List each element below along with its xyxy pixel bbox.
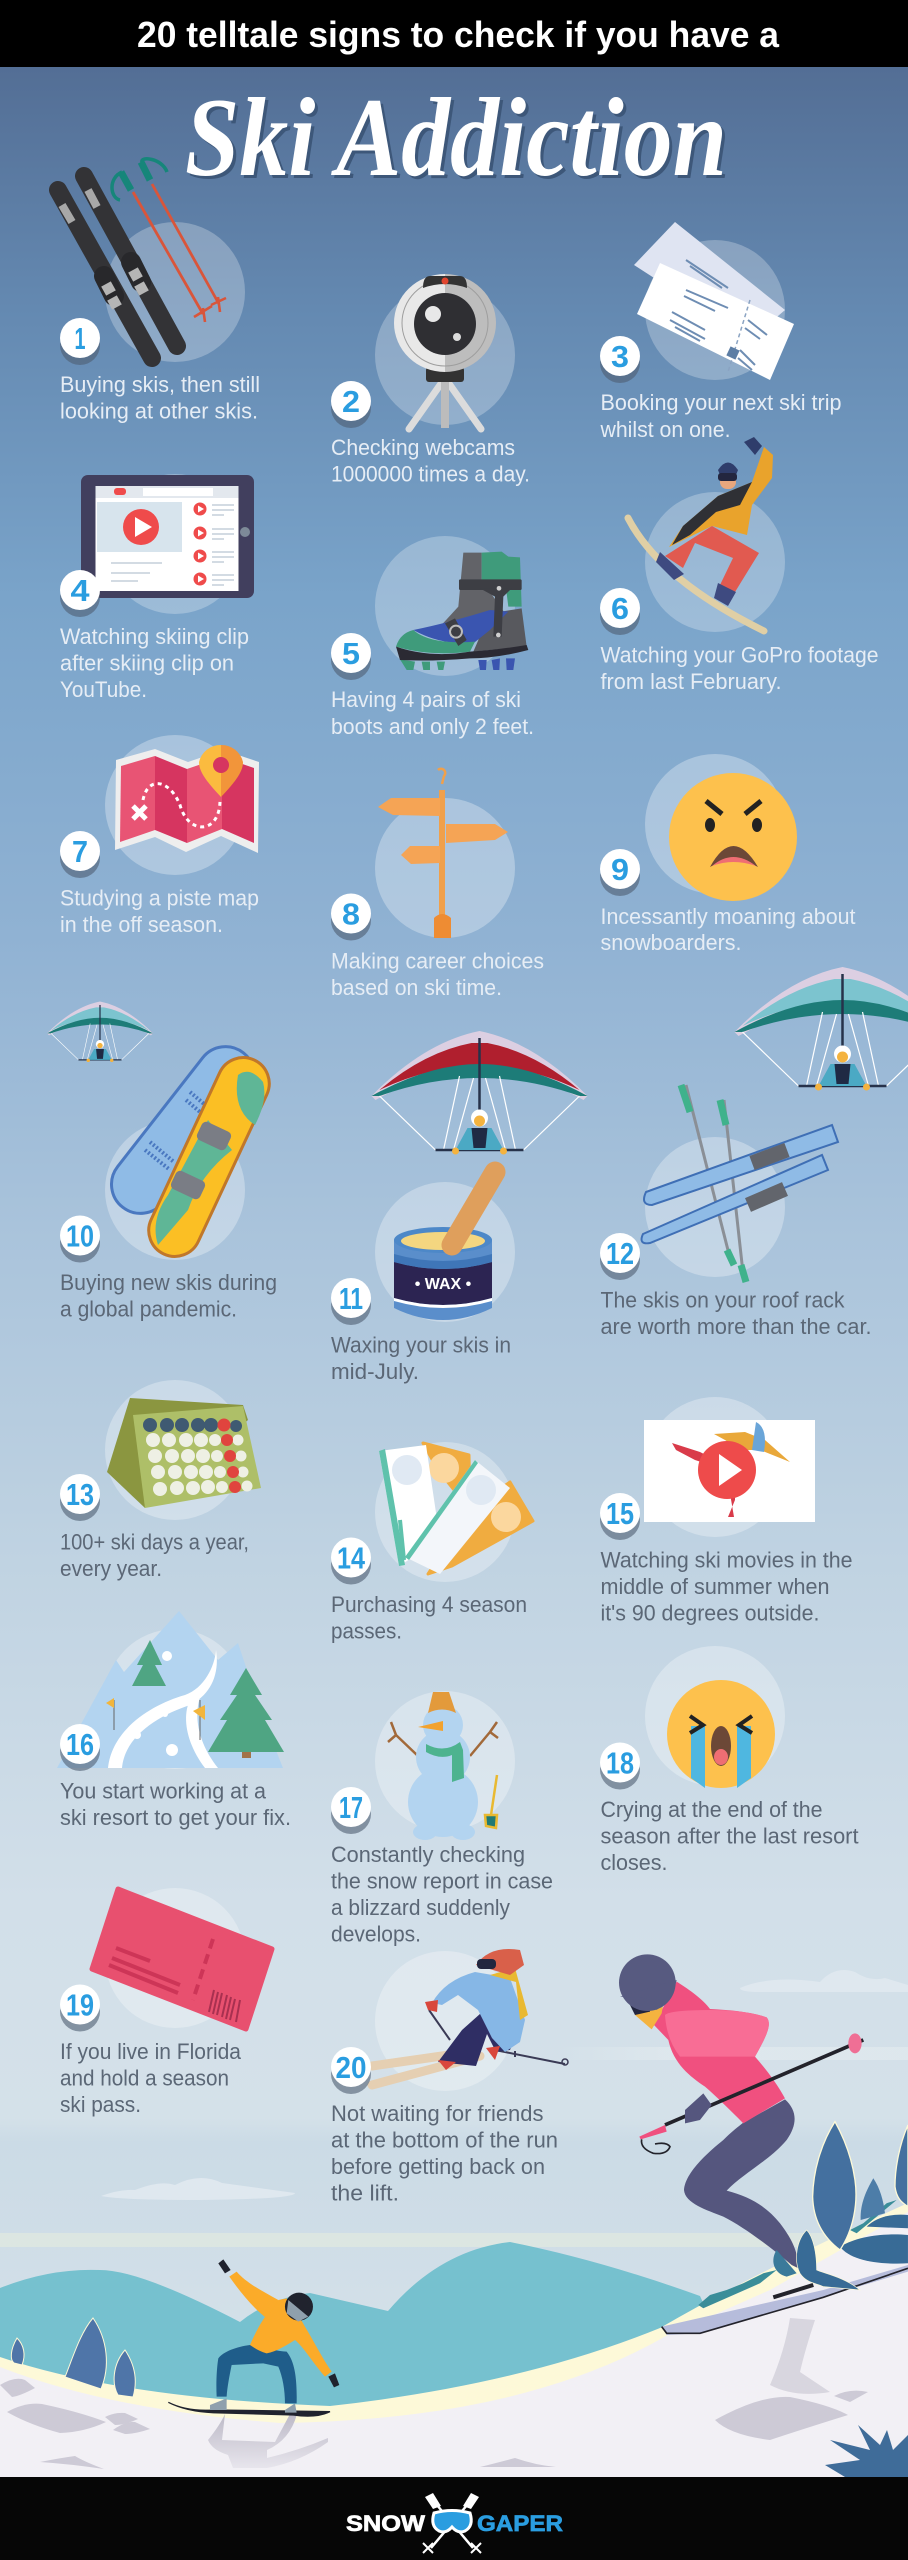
text 20: at the bottom of the run [331,2128,558,2152]
text 3: whilst on one. [600,417,730,442]
text 18 [600,1797,859,1875]
text 12: The skis on your roof rack [600,1288,845,1312]
snow slope [0,2203,908,2480]
badge 5 [331,633,371,680]
icon: skier [372,1949,568,2085]
badge 15 [600,1493,640,1540]
text 16: You start working at a [60,1778,266,1804]
icon: blue skis and poles [642,1085,838,1282]
badge 9 [600,849,640,896]
hills [0,2242,720,2420]
text 19 [60,2039,241,2117]
text 6 [600,642,878,694]
badge 16 [60,1724,100,1771]
header bar: 20 telltale signs to check if you have a [137,14,780,55]
badge 19: 19 [66,1988,94,2022]
text 20: before getting back on [331,2154,545,2179]
icon: video with skater [644,1420,815,1522]
sign 7: map [60,735,259,937]
badge 19 [60,1984,100,2032]
text 4: after skiing clip on [60,650,234,676]
badge 4: 4 [70,573,90,608]
footer bar [0,2477,908,2560]
icon: crying emoji [667,1680,775,1788]
text 10: Buying new skis during [60,1270,277,1295]
badge 8 [331,894,371,940]
text 9: Incessantly moaning about [600,904,856,929]
badge 17: 17 [339,1790,363,1825]
icon: snowboarder jump [628,437,773,631]
icon: ski boot [396,552,528,670]
badge 8: 8 [342,896,360,932]
left plants [11,2318,135,2397]
badge 6: 6 [611,591,629,626]
text 16 [60,1778,291,1830]
sign 16: ski resort [57,1611,291,1830]
text 18: season after the last resort [600,1824,859,1848]
text 12: are worth more than the car. [600,1314,872,1339]
icon: angry emoji [669,773,797,901]
icon: piste map [115,745,259,853]
badge 2 [331,381,371,428]
icon: mountain slope and trees [57,1611,284,1768]
snow shadows [0,2318,868,2469]
badge 13: 13 [66,1477,94,1512]
text 11 [331,1332,511,1384]
text 1: Buying skis, then still [60,372,260,397]
text 19: and hold a season [60,2066,229,2090]
badge 4 [60,570,100,617]
badge 7 [60,831,100,878]
badge 18 [600,1742,640,1790]
text 17: the snow report in case [331,1868,553,1894]
badge 10: 10 [66,1218,94,1254]
text 4: YouTube. [60,677,147,702]
gliders [47,967,908,1154]
text 19: If you live in Florida [60,2039,241,2064]
badge 10 [60,1216,100,1262]
text 9 [600,904,856,955]
icon: calendar [107,1398,261,1508]
sign 18: crying face [600,1646,859,1875]
badge 6 [600,588,640,635]
badge 17 [331,1787,371,1834]
text 3: Booking your next ski trip [600,390,842,415]
sign 1: skis [58,159,260,424]
text 8 [331,948,544,1000]
text 19: ski pass. [60,2092,141,2117]
text 6: Watching your GoPro footage [600,642,878,668]
sign 15: ski movies [600,1397,852,1626]
text 9: snowboarders. [600,930,742,955]
icon: wax can [394,1172,495,1320]
badge 2: 2 [342,384,360,419]
badge 11 [331,1278,371,1325]
sign 9: angry face [600,754,856,955]
middle glider [372,1031,588,1154]
text 6: from last February. [600,669,782,694]
badge 9: 9 [611,852,629,887]
sign 20: skier [331,1949,568,2206]
sign 10: snowboards [60,1035,278,1322]
badge 12: 12 [606,1236,634,1271]
text 4: Watching skiing clip [60,624,249,649]
text 20: Not waiting for friends [331,2101,544,2126]
text 4 [60,624,249,702]
sign 14: passes [331,1442,533,1644]
title: Ski Addiction [188,79,730,203]
badge 7: 7 [72,834,88,869]
text 11: mid-July. [331,1359,419,1384]
text 18: Crying at the end of the [600,1797,822,1822]
text 5 [331,687,534,739]
icon: season passes [379,1443,533,1574]
text 7: in the off season. [60,912,223,937]
text 18: closes. [600,1850,668,1875]
badge 3 [600,336,640,383]
text 13 [60,1530,249,1581]
text 2 [331,435,530,486]
text 17: Constantly checking [331,1842,525,1867]
badge 11: 11 [339,1281,363,1316]
icon: snowman [388,1692,498,1840]
text 8: based on ski time. [331,975,502,1000]
text 2: 1000000 times a day. [331,462,530,486]
text 15: middle of summer when [600,1574,830,1599]
clouds [101,1970,908,2200]
badge 18: 18 [606,1746,634,1780]
text 1: looking at other skis. [60,398,258,424]
badge 1: 1 [74,321,86,356]
text 10: a global pandemic. [60,1296,237,1322]
text 13: every year. [60,1556,162,1581]
sign 8: signpost [331,769,544,1000]
text 15: Watching ski movies in the [600,1548,852,1572]
text 5: boots and only 2 feet. [331,714,534,739]
text 20 [331,2101,558,2206]
icon: tablet with video [81,475,254,598]
icon: webcam [394,274,496,429]
text 5: Having 4 pairs of ski [331,687,521,712]
text 20: the lift. [331,2180,399,2206]
badge 3: 3 [611,339,629,374]
text 11: Waxing your skis in [331,1332,511,1358]
text 13: 100+ ski days a year, [60,1530,249,1554]
text 17: develops. [331,1922,421,1946]
icon: snowboards [100,1035,278,1265]
header bar [0,0,908,67]
badge 16: 16 [66,1727,94,1762]
badge 15: 15 [606,1496,634,1531]
text 3 [600,390,842,442]
title: Ski Addiction [185,76,727,200]
icon: skis and poles [58,159,226,358]
badge 20: 20 [336,2050,366,2085]
icon: wax can: • WAX • [415,1276,472,1293]
logo: SNOW [346,2511,425,2536]
text 2: Checking webcams [331,435,515,460]
sign 4: tablet [60,474,254,702]
badge 13 [60,1474,100,1521]
text 7 [60,886,259,937]
icon: ski pass [92,1889,272,2029]
haze bands [0,2047,908,2247]
logo [346,2493,563,2553]
icon: signpost [378,769,508,938]
text 14: Purchasing 4 season [331,1592,527,1617]
sign 5: boot [331,536,534,739]
badge 1 [60,318,100,365]
text 1 [60,372,260,424]
snowboarder [168,2259,339,2416]
logo: GAPER [477,2511,563,2536]
big skier [619,1954,908,2335]
badge 14 [331,1538,371,1584]
text 14 [331,1592,527,1644]
text 10 [60,1270,277,1322]
sign 6: snowboarder [600,437,878,694]
text 15: it's 90 degrees outside. [600,1600,820,1626]
icon: tickets [634,222,794,380]
sign 11: wax [331,1172,515,1384]
sign 19: pass [60,1888,272,2117]
sign 3: tickets [600,222,842,442]
badge 14: 14 [337,1540,366,1576]
sign 2: webcam [331,274,530,486]
text 17: a blizzard suddenly [331,1895,511,1920]
text 17 [331,1842,553,1946]
sign 12: skis [600,1085,872,1339]
text 16: ski resort to get your fix. [60,1805,291,1830]
sign 17: snowman [331,1691,553,1946]
bottom right plant [825,2425,908,2480]
badge 12 [600,1233,640,1280]
right glider [734,967,908,1090]
small glider [47,1002,153,1062]
text 7: Studying a piste map [60,886,259,910]
badge 20 [331,2047,371,2094]
sign 13: calendar [60,1380,261,1581]
text 8: Making career choices [331,948,544,974]
text 14: passes. [331,1618,402,1644]
badge 5: 5 [342,636,360,671]
text 15 [600,1548,852,1626]
text 12 [600,1288,872,1339]
